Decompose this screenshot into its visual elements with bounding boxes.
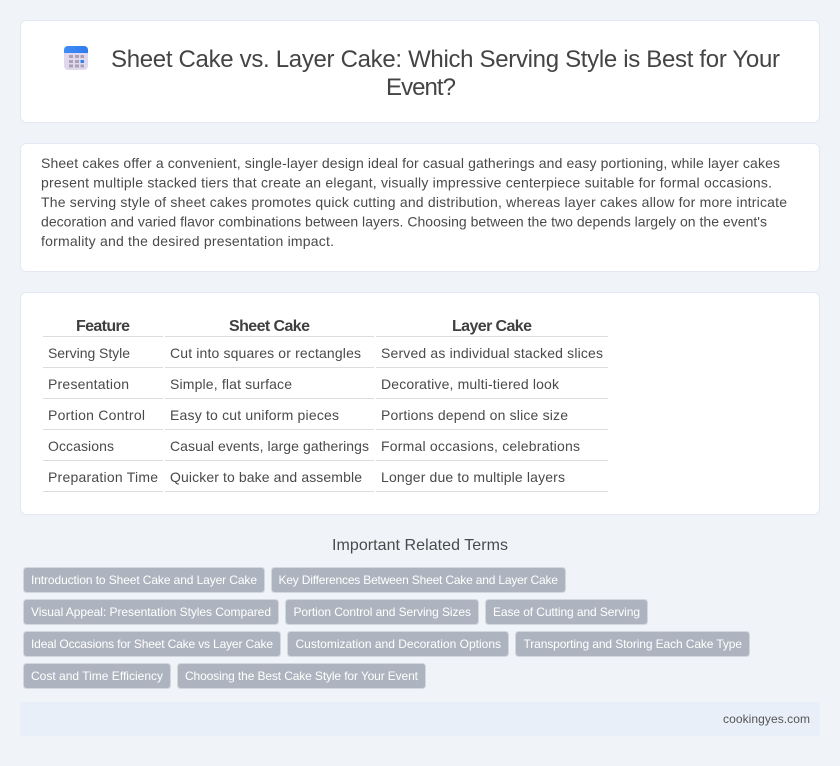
text block: description — [41, 155, 787, 249]
footer: cookingyes.com — [723, 712, 810, 726]
row: presentation: Presentation — [48, 376, 129, 392]
title: Event? — [386, 74, 456, 101]
panel: description — [20, 144, 820, 272]
tag: Key Differences Between Sheet Cake and Layer Cake — [278, 573, 558, 587]
tag — [486, 600, 648, 624]
heading: important related terms: Important Related Terms — [332, 537, 508, 554]
tag — [24, 632, 280, 656]
row: serving style — [48, 345, 603, 361]
tag: Ease of Cutting and Serving — [493, 605, 640, 619]
text block: description: Sheet cakes offer a convenient, single-layer design ideal for casual gatherings and easy portioning, while layer cakes — [41, 155, 780, 171]
row: preparation time — [48, 469, 565, 485]
row: occasions: Casual events, large gatherings — [170, 438, 369, 454]
tag: Customization and Decoration Options — [296, 637, 501, 651]
tag — [286, 600, 478, 624]
table header — [76, 318, 532, 335]
row: portion control: Portion Control — [48, 407, 145, 423]
footer — [20, 702, 820, 736]
tag: Ideal Occasions for Sheet Cake vs Layer Cake — [31, 637, 273, 651]
title: Sheet Cake vs. Layer Cake: Which Serving Style is Best for Your — [111, 46, 780, 73]
table header: Sheet Cake — [229, 318, 310, 335]
row: preparation time: Preparation Time — [48, 469, 158, 485]
row: preparation time: Longer due to multiple layers — [381, 469, 565, 485]
tag: Visual Appeal: Presentation Styles Compared — [31, 605, 271, 619]
row: occasions: Occasions — [48, 438, 114, 454]
icon: calendar — [64, 46, 88, 70]
tag — [24, 568, 264, 592]
text block: description: The serving style of sheet cakes promotes quick cutting and distribution, whereas layer cakes allow for more intricate — [41, 194, 787, 210]
row: occasions: Formal occasions, celebrations — [381, 438, 580, 454]
tag: Cost and Time Efficiency — [31, 669, 163, 683]
text block: description: decoration and varied flavor combinations between layers. Choosing between the two depends largely on the event's — [41, 214, 767, 230]
text block: description: formality and the desired presentation impact. — [41, 233, 334, 249]
tag — [24, 600, 278, 624]
row: portion control: Portions depend on slice size — [381, 407, 568, 423]
tag — [272, 568, 566, 592]
tag — [288, 632, 508, 656]
tag: Portion Control and Serving Sizes — [294, 605, 471, 619]
row: serving style: Served as individual stacked slices — [381, 345, 603, 361]
tag: Introduction to Sheet Cake and Layer Cake — [31, 573, 257, 587]
tag: Transporting and Storing Each Cake Type — [524, 637, 742, 651]
panel: header — [20, 20, 820, 122]
row: presentation: Simple, flat surface — [170, 376, 292, 392]
text block: description: present multiple stacked tiers that create an elegant, visually impressive centerpiece suitable for formal occasions. — [41, 174, 772, 190]
tag — [516, 632, 750, 656]
title — [111, 46, 780, 101]
row: preparation time: Quicker to bake and assemble — [170, 469, 362, 485]
row: serving style: Cut into squares or rectangles — [170, 345, 361, 361]
tag: Choosing the Best Cake Style for Your Event — [185, 669, 419, 683]
table header: Feature — [76, 318, 130, 335]
panel: comparison table — [20, 292, 820, 514]
row: presentation: Decorative, multi-tiered look — [381, 376, 560, 392]
row: portion control — [48, 407, 568, 423]
tag — [24, 664, 170, 688]
tags: related terms — [24, 568, 750, 688]
row: occasions — [48, 438, 580, 454]
row: serving style: Serving Style — [48, 345, 130, 361]
table header: Layer Cake — [452, 318, 532, 335]
tag — [178, 664, 426, 688]
row: presentation — [48, 376, 560, 392]
row: portion control: Easy to cut uniform pieces — [170, 407, 339, 423]
